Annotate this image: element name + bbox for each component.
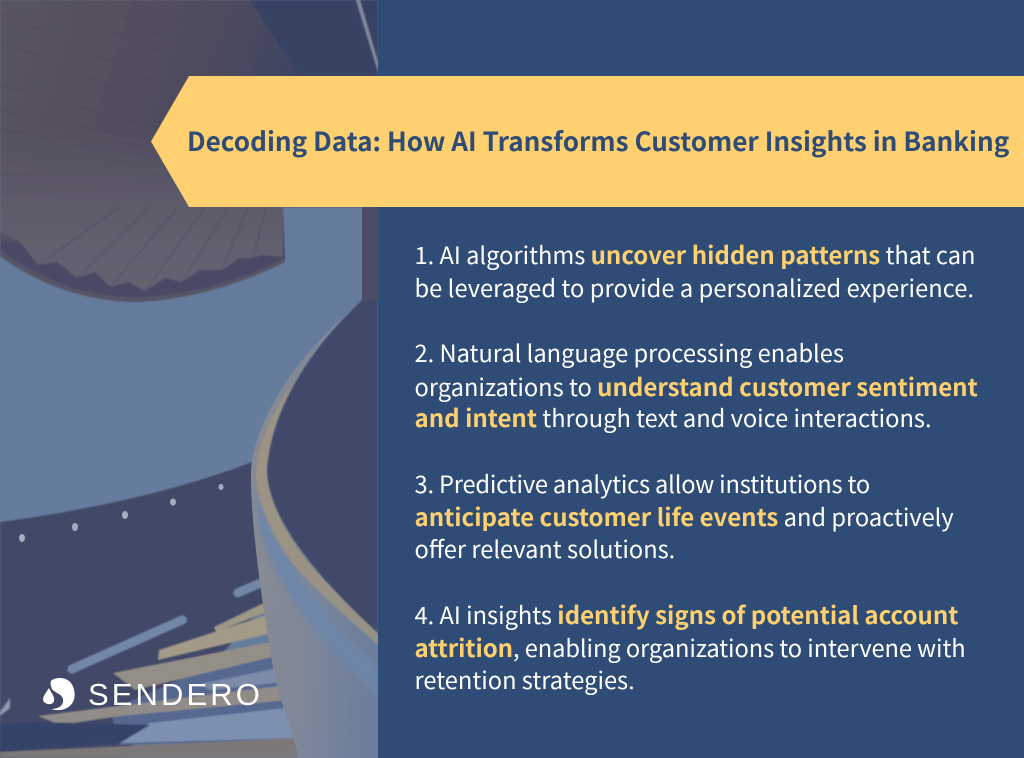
- text block: insights list: 4. AI insights identify signs of potential account: [414, 596, 958, 631]
- text block: insights list: [414, 236, 978, 696]
- logo: Sendero: [43, 677, 263, 712]
- text block: insights list: be leveraged to provide a personalized experience.: [414, 270, 974, 304]
- panel: spiral staircase photo: [0, 0, 378, 758]
- text block: insights list: offer relevant solutions.: [414, 531, 675, 565]
- text block: insights list: organizations to understand customer sentiment: [414, 368, 978, 403]
- text block: insights list: anticipate customer life events and proactively: [414, 498, 954, 533]
- text block: insights list: 3. Predictive analytics allow institutions to: [414, 466, 870, 500]
- curved handrail: [251, 207, 378, 758]
- text block: insights list: retention strategies.: [414, 662, 635, 696]
- stair treads: [0, 576, 297, 758]
- text block: insights list: attrition, enabling organizations to intervene with: [414, 629, 966, 664]
- text block: insights list: 2. Natural language processing enables: [414, 335, 844, 369]
- upper spiral treads: [0, 0, 378, 302]
- staircase soffit wall: [0, 462, 268, 758]
- text block: insights list: 1. AI algorithms uncover hidden patterns that can: [414, 236, 975, 271]
- icon: logo drop: [43, 678, 75, 710]
- wall studs: [19, 484, 224, 542]
- text block: insights list: and intent through text and voice interactions.: [414, 399, 932, 434]
- wordmark: SENDERO: [88, 677, 263, 712]
- title banner: [151, 76, 1024, 207]
- title: Decoding Data: How AI Transforms Customer Insights in Banking: [187, 121, 1009, 159]
